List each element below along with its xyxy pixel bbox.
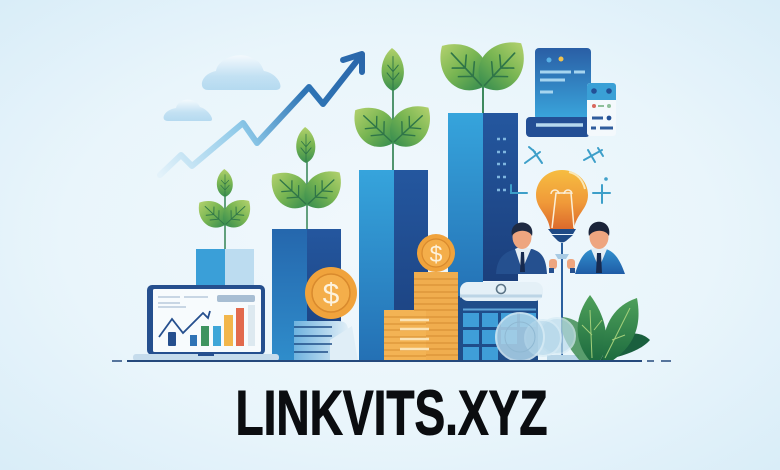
handshake hands [549, 254, 575, 273]
coin stack [294, 321, 358, 361]
bar 4 [448, 113, 518, 303]
bar 2 [272, 229, 341, 361]
laptop [133, 285, 279, 361]
bar 1 [196, 249, 254, 285]
foliage [562, 295, 650, 361]
person right [575, 222, 625, 274]
large cloud [202, 55, 280, 90]
gold stacks [384, 272, 458, 361]
lamp pole [547, 243, 579, 360]
growth arrow [160, 54, 362, 175]
dashboard panel [526, 48, 591, 137]
plant 4 [428, 30, 537, 113]
dollar coin large [305, 267, 357, 319]
dashboard side card [587, 83, 616, 136]
plant 3 [344, 48, 441, 170]
dollar coin small: $ [430, 241, 443, 267]
dollar coin small [417, 234, 455, 272]
light bulb [536, 170, 588, 242]
dollar coin large: $ [323, 278, 340, 311]
ground line [112, 360, 671, 362]
idea sparks [511, 147, 610, 203]
glass coins [496, 313, 575, 361]
small cloud [164, 100, 212, 121]
title: LINKVITS.XYZ [236, 378, 548, 448]
plant 2 [262, 127, 351, 229]
person left [496, 222, 547, 274]
plant 1 [192, 169, 258, 249]
bar 3 [359, 170, 428, 361]
calendar [458, 282, 543, 361]
